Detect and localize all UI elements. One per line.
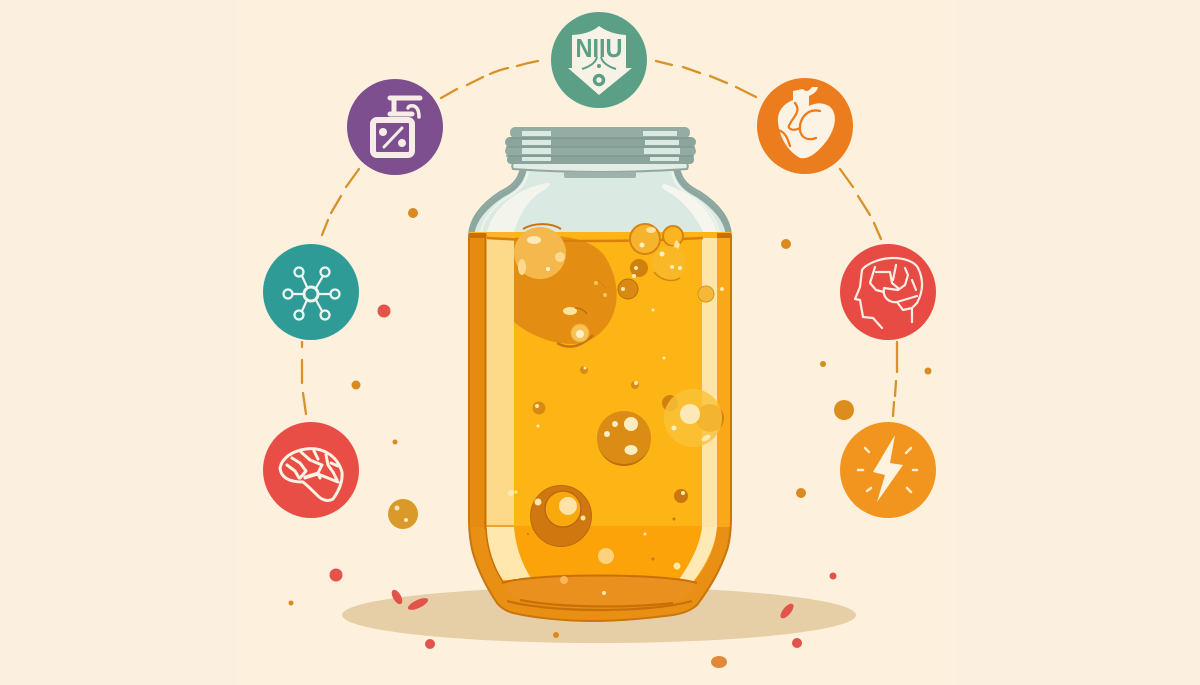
jar base bbox=[502, 575, 697, 606]
glass body bbox=[469, 168, 731, 235]
icon: network nodes bbox=[263, 244, 359, 340]
jar lid bbox=[505, 127, 696, 178]
glass highlights bbox=[487, 183, 550, 232]
shield lettering: NIIU bbox=[576, 33, 622, 63]
bubbles bbox=[508, 224, 724, 595]
ground shadow bbox=[342, 587, 856, 643]
icon: heart bbox=[757, 78, 853, 174]
icon: lightning bolt bbox=[840, 422, 936, 518]
icon: device with tap bbox=[347, 79, 443, 175]
glass shoulder outline bbox=[472, 170, 728, 233]
infographic canvas bbox=[263, 12, 936, 668]
dashed arc connector bbox=[302, 61, 897, 416]
liquid bbox=[469, 231, 731, 640]
floating dots bbox=[288, 208, 932, 668]
jar bbox=[469, 127, 731, 640]
large dark bubble bbox=[514, 236, 617, 344]
icon: head with brain bbox=[840, 244, 936, 340]
icon: brain bbox=[263, 422, 359, 518]
icon: shield (top) bbox=[551, 12, 647, 108]
